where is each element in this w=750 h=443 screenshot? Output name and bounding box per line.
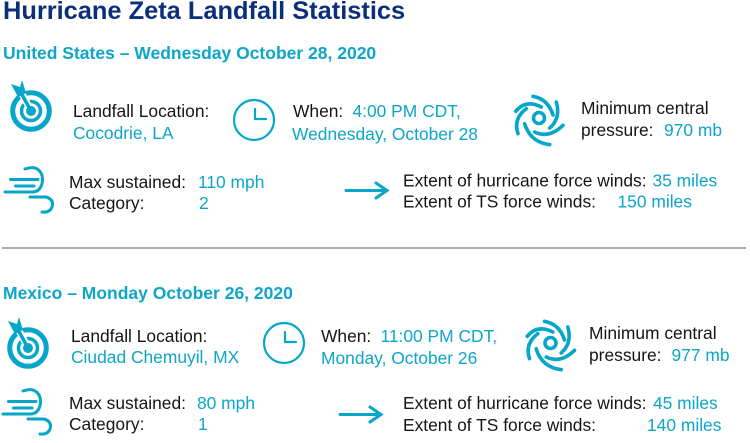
text: minimum central pressure: 977 mb bbox=[672, 345, 730, 365]
arrow bbox=[346, 183, 387, 198]
text: max sustained and category: Max sustained: bbox=[69, 172, 186, 192]
text: max sustained and category: 110 mph bbox=[198, 172, 264, 192]
icon: clock bbox=[264, 323, 304, 363]
text: when: Monday, October 26 bbox=[321, 348, 477, 368]
text: minimum central pressure: Minimum central bbox=[589, 323, 717, 343]
text: landfall location: Cocodrie, LA bbox=[73, 123, 174, 143]
heading: Mexico: Mexico – Monday October 26, 2020 bbox=[3, 283, 293, 303]
text: wind extents: 150 miles bbox=[618, 192, 692, 212]
panel: Mexico bbox=[3, 283, 730, 435]
text: max sustained and category: Category: bbox=[69, 193, 144, 213]
text: max sustained and category: 1 bbox=[198, 414, 208, 434]
icon: hurricane bbox=[527, 321, 574, 370]
text: minimum central pressure bbox=[589, 323, 730, 365]
icon: wind bbox=[3, 390, 51, 434]
text: wind extents bbox=[403, 393, 722, 435]
text: landfall location: Ciudad Chemuyil, MX bbox=[71, 347, 240, 367]
text: wind extents: 45 miles bbox=[653, 393, 718, 413]
text: when: 4:00 PM CDT, bbox=[352, 101, 461, 121]
text: wind extents: Extent of TS force winds: bbox=[403, 192, 596, 212]
panel: United States bbox=[3, 43, 722, 213]
text: max sustained and category bbox=[69, 172, 264, 213]
text: max sustained and category: Category: bbox=[69, 414, 144, 434]
text: wind extents bbox=[403, 170, 718, 212]
text: when: Wednesday, October 28 bbox=[292, 124, 478, 144]
text: landfall location bbox=[71, 326, 240, 367]
text: wind extents: 140 miles bbox=[647, 415, 722, 435]
text: landfall location: Landfall Location: bbox=[73, 101, 209, 121]
text: when bbox=[321, 326, 497, 368]
text: wind extents: Extent of hurricane force winds: bbox=[403, 170, 647, 190]
text: minimum central pressure: 970 mb bbox=[664, 120, 722, 140]
text: landfall location bbox=[73, 101, 209, 143]
text: minimum central pressure: pressure: bbox=[589, 345, 662, 365]
text: minimum central pressure bbox=[581, 98, 722, 140]
text: minimum central pressure: Minimum central bbox=[581, 98, 709, 118]
heading: United States: United States – Wednesday October 28, 2020 bbox=[3, 43, 376, 63]
text: when: When: bbox=[321, 326, 371, 346]
text: when: When: bbox=[293, 101, 343, 121]
text: landfall location: Landfall Location: bbox=[71, 326, 207, 346]
text: wind extents: 35 miles bbox=[652, 170, 718, 190]
text: max sustained and category: Max sustained: bbox=[69, 393, 186, 413]
text: wind extents: Extent of hurricane force winds: bbox=[403, 393, 647, 413]
text: max sustained and category: 2 bbox=[199, 193, 209, 213]
icon: target bbox=[8, 317, 46, 366]
icon: clock bbox=[234, 100, 274, 140]
text: when: 11:00 PM CDT, bbox=[380, 326, 497, 346]
text: when bbox=[292, 101, 478, 144]
arrow bbox=[340, 407, 381, 422]
text: max sustained and category bbox=[69, 393, 255, 434]
text: wind extents: Extent of TS force winds: bbox=[403, 415, 596, 435]
icon: hurricane bbox=[516, 96, 563, 145]
icon: target bbox=[11, 80, 49, 129]
text: minimum central pressure: pressure: bbox=[581, 120, 654, 140]
icon: wind bbox=[5, 168, 53, 212]
text: max sustained and category: 80 mph bbox=[197, 393, 255, 413]
